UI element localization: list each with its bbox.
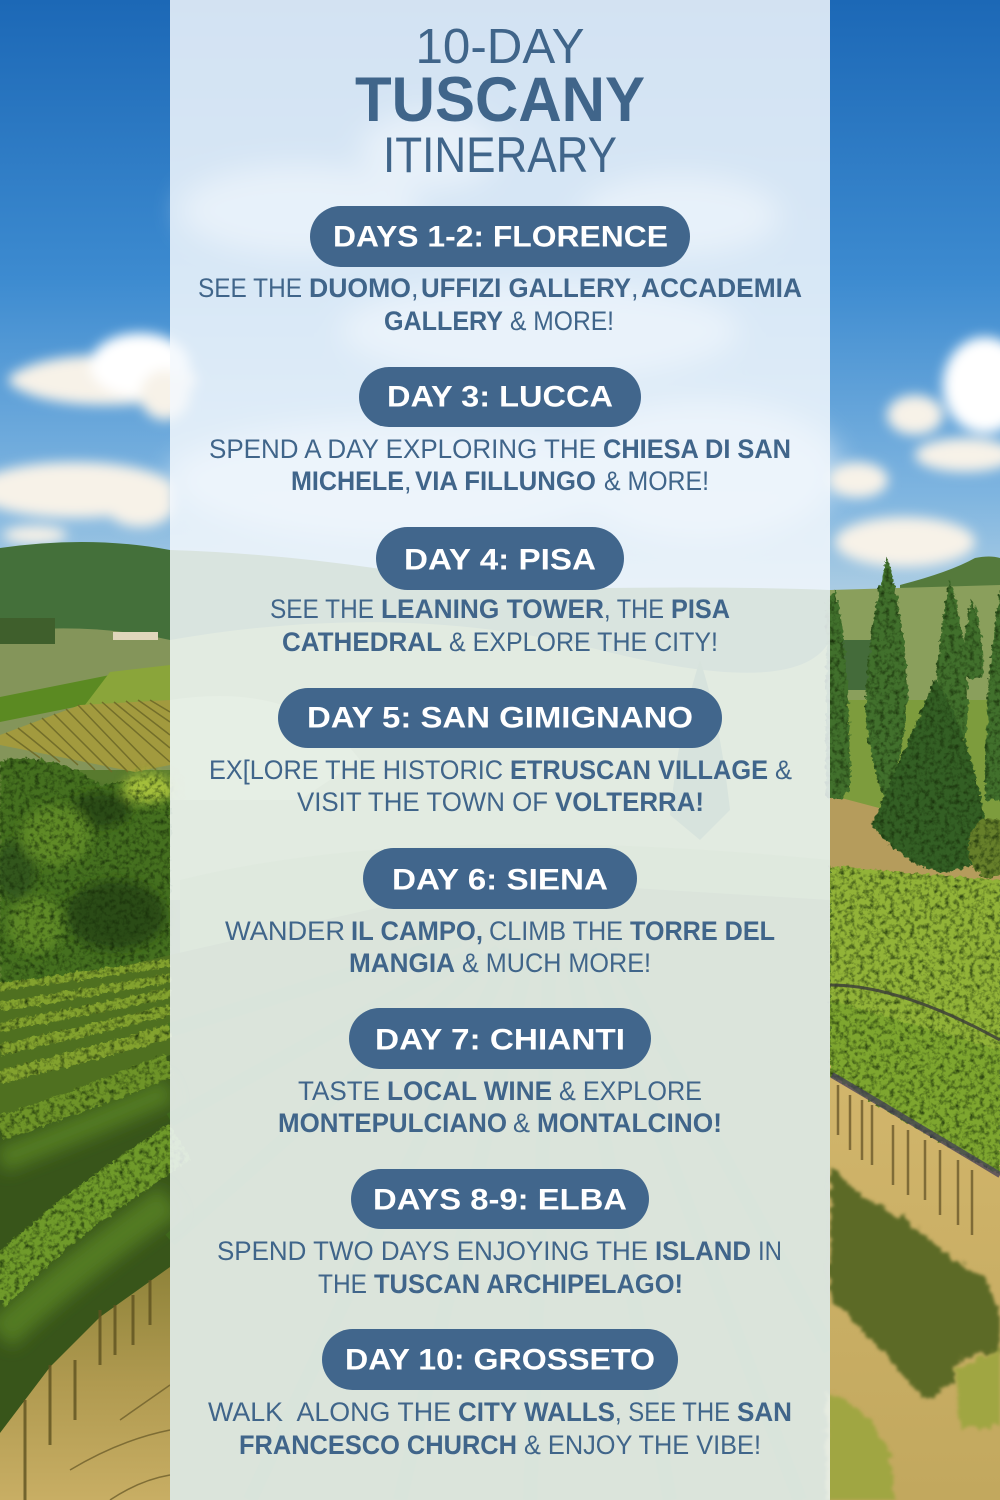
description: , THE [604, 594, 664, 624]
description [270, 594, 730, 657]
pill heading: DAYS 1-2: FLORENCE [333, 220, 668, 254]
section: day 3 Lucca [209, 367, 791, 496]
section: days 8-9 Elba [217, 1169, 782, 1299]
right hillside vineyard [830, 866, 1000, 1175]
description: CLIMB THE [489, 916, 623, 946]
description: , SEE THE [615, 1397, 730, 1427]
pill heading [376, 527, 624, 590]
description: WALK ALONG THE [208, 1397, 451, 1427]
panel: translucent white column [170, 0, 830, 1500]
description: CHIESA DI SAN [603, 434, 791, 464]
description [198, 273, 802, 336]
pill heading [349, 1008, 651, 1069]
pill heading [351, 1169, 649, 1229]
pill heading [310, 206, 690, 267]
pill heading: DAY 4: PISA [404, 544, 596, 576]
tree shadow on soil [830, 1167, 1000, 1400]
description: , [631, 273, 639, 303]
description: MANGIA [349, 948, 455, 978]
title line: ITINERARY: ITINERARY [383, 127, 617, 183]
left fields [0, 628, 170, 770]
pill heading [363, 848, 637, 909]
description: SAN [737, 1397, 792, 1427]
description: MONTALCINO! [537, 1108, 722, 1138]
description: DUOMO [309, 273, 411, 303]
description: , [411, 273, 419, 303]
description: & ENJOY THE VIBE! [524, 1430, 761, 1460]
mid-tone shading under the lit vine rows [0, 1090, 170, 1335]
pill heading: DAY 10: GROSSETO [345, 1344, 655, 1376]
description: & MORE! [510, 306, 614, 336]
description: THE [318, 1269, 367, 1299]
description: ETRUSCAN VILLAGE [510, 755, 768, 785]
ground base [0, 610, 1000, 1500]
description: FRANCESCO CHURCH [239, 1430, 517, 1460]
title [355, 20, 645, 183]
section: day 5 San Gimignano [209, 688, 792, 817]
description: LEANING TOWER [381, 594, 604, 624]
central cypresses [670, 660, 730, 840]
description: WANDER [225, 916, 345, 946]
description: MICHELE [291, 466, 404, 496]
description: , [404, 466, 412, 496]
pill heading [322, 1329, 678, 1390]
description: & MORE! [604, 466, 709, 496]
clouds behind panel [170, 110, 840, 540]
section: day 4 Pisa [270, 527, 730, 657]
description: TASTE [298, 1076, 380, 1106]
description: & EXPLORE THE CITY! [449, 627, 718, 657]
pill heading: DAY 3: LUCCA [387, 380, 613, 414]
centre fields under panel [170, 622, 830, 900]
vineyard left and centre [0, 880, 830, 1500]
section: day 6 Siena [225, 848, 775, 978]
description: CITY WALLS [458, 1397, 615, 1427]
description: & [775, 755, 792, 785]
right hillside soil [830, 1060, 1000, 1500]
description [208, 1397, 792, 1460]
description: EX[LORE THE HISTORIC [209, 755, 503, 785]
description: & MUCH MORE! [462, 948, 651, 978]
description: ACCADEMIA [641, 273, 802, 303]
pill heading: DAY 6: SIENA [392, 864, 608, 896]
pill heading: DAY 7: CHIANTI [375, 1024, 625, 1056]
description [217, 1236, 782, 1299]
title line: 10-DAY: 10-DAY [416, 20, 584, 74]
pill heading [278, 688, 722, 748]
description: TUSCAN ARCHIPELAGO! [374, 1269, 683, 1299]
pill heading [359, 367, 641, 427]
description: SPEND TWO DAYS ENJOYING THE [217, 1236, 648, 1266]
description: LOCAL WINE [387, 1076, 552, 1106]
description: SPEND A DAY EXPLORING THE [209, 434, 596, 464]
description: VIA FILLUNGO [415, 466, 596, 496]
right dry bank [830, 795, 1000, 885]
centre rows [170, 940, 830, 1500]
far hills [0, 542, 1000, 760]
description: & EXPLORE [559, 1076, 702, 1106]
left soil bank [0, 1267, 170, 1500]
description: TORRE DEL [630, 916, 775, 946]
description [225, 916, 775, 978]
section: day 7 Chianti [278, 1008, 722, 1138]
left tree mass [0, 758, 174, 990]
grass patches [826, 1345, 1000, 1500]
description [278, 1076, 722, 1138]
description: VOLTERRA! [555, 787, 704, 817]
description [209, 755, 792, 817]
description: VISIT THE TOWN OF [297, 787, 548, 817]
description [209, 434, 791, 496]
cypresses [826, 555, 1000, 878]
description: MONTEPULCIANO [278, 1108, 507, 1138]
section: day 10 Grosseto [208, 1329, 792, 1460]
description: & [513, 1108, 530, 1138]
description: SEE THE [198, 273, 302, 303]
description: GALLERY [384, 306, 503, 336]
description: ISLAND [655, 1236, 751, 1266]
description: SEE THE [270, 594, 374, 624]
description: UFFIZI GALLERY [421, 273, 631, 303]
clouds at the sides [0, 333, 1000, 567]
pill heading: DAYS 8-9: ELBA [373, 1184, 627, 1216]
description: IL CAMPO, [351, 916, 483, 946]
description: PISA [671, 594, 730, 624]
section: days 1-2 Florence [198, 206, 802, 336]
title line: TUSCANY: TUSCANY [355, 65, 645, 135]
pill heading: DAY 5: SAN GIMIGNANO [307, 702, 693, 734]
grape line and vine trunks [832, 1075, 1000, 1235]
description: CATHEDRAL [282, 627, 442, 657]
description: IN [758, 1236, 782, 1266]
